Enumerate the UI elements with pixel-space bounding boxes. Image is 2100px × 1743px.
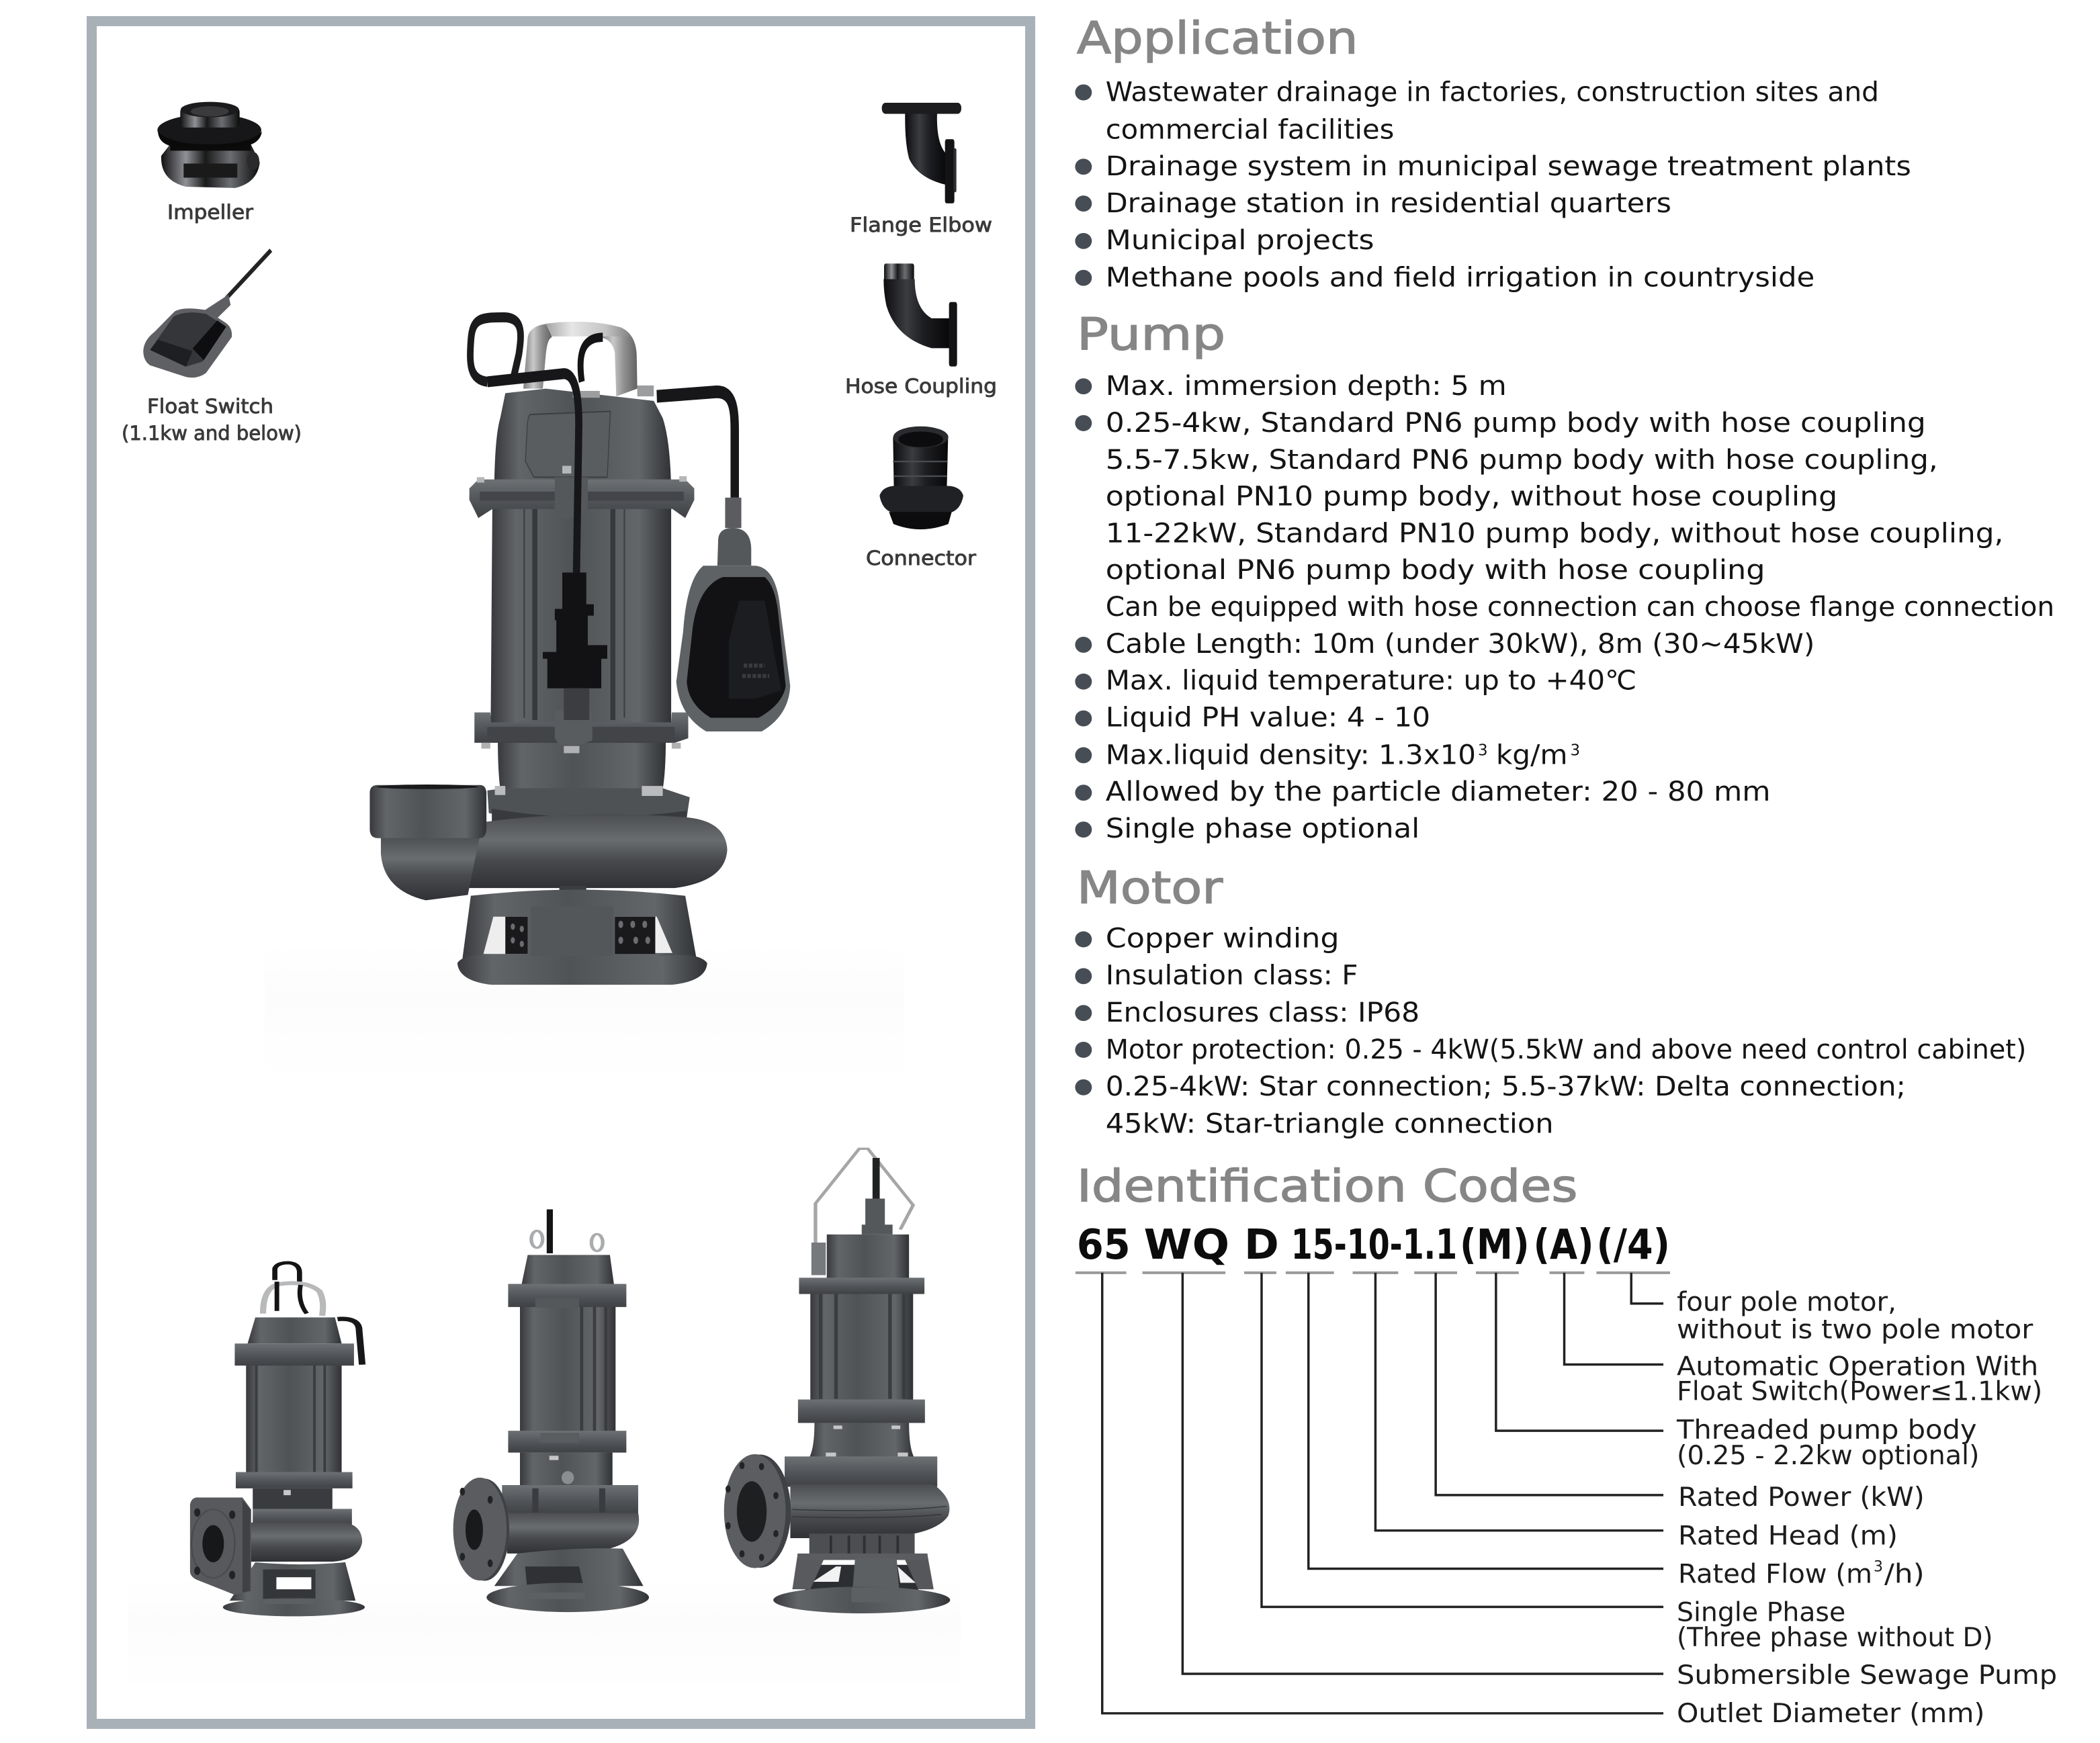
neck — [498, 740, 666, 797]
volute — [505, 1513, 639, 1554]
handle cable — [275, 1263, 300, 1282]
upper flange — [799, 1278, 924, 1294]
cap — [521, 1255, 614, 1285]
flange side face — [243, 1500, 250, 1593]
code explanations: without is two pole motor — [1677, 1315, 2033, 1345]
base — [486, 1582, 649, 1612]
lower flange — [474, 713, 689, 743]
list: pump specifications: optional PN6 pump body with hose coupling — [1106, 555, 1765, 586]
list: motor specifications: 45kW: Star-triangle connection — [1106, 1109, 1554, 1140]
stand window — [276, 1577, 311, 1589]
list: motor specifications: Motor protection: 0.25 - 4kW(5.5kW and above need control cabinet) — [1106, 1034, 2026, 1065]
float collar — [717, 528, 751, 566]
model code: D — [1244, 1220, 1279, 1269]
outlet elbow — [381, 836, 480, 900]
seal plate bolts — [495, 786, 663, 796]
model code: 65 — [1077, 1220, 1131, 1269]
code explanations: Rated Power (kW) — [1678, 1482, 1925, 1513]
ribs — [821, 1293, 904, 1399]
stand windows — [813, 1566, 916, 1582]
strainer right holes — [619, 921, 650, 944]
code underlines — [1076, 1271, 1670, 1274]
code explanations: Rated Flow (m — [1678, 1559, 1872, 1589]
label: Float Switch — [122, 395, 302, 445]
round flange side — [460, 1478, 509, 1581]
barrel ribs — [524, 509, 624, 718]
cable gland — [862, 1199, 893, 1235]
lower flange shade — [487, 727, 674, 740]
heading: Identification Codes: Identification Codes — [1077, 1160, 1577, 1212]
code explanations: Rated Head (m) — [1678, 1521, 1898, 1552]
flange bore — [466, 1509, 483, 1550]
cap — [248, 1317, 342, 1343]
float dark panel — [687, 577, 786, 718]
outlet bore — [202, 1525, 224, 1562]
flange bore — [737, 1481, 767, 1541]
motor cap — [494, 389, 671, 488]
model code: (M) — [1460, 1220, 1530, 1269]
float body — [676, 566, 790, 731]
outlet cup — [369, 785, 486, 838]
list: motor specifications: 0.25-4kW: Star connection; 5.5-37kW: Delta connection; — [1106, 1071, 1906, 1102]
panel: product images frame — [91, 21, 1031, 1724]
code explanations: (0.25 - 2.2kw optional) — [1677, 1441, 1980, 1471]
lower flange — [236, 1472, 353, 1488]
list: application items: Drainage station in residential quarters — [1106, 188, 1671, 219]
neck — [810, 1423, 914, 1458]
section: Identification Codes — [1076, 1160, 2057, 1729]
cap — [827, 1235, 909, 1279]
heading: Pump: Pump — [1077, 308, 1225, 360]
small pump: threaded outlet — [190, 1263, 365, 1616]
stand neck — [560, 886, 586, 904]
seal ring — [502, 1485, 638, 1515]
list: pump specifications: 0.25-4kw, Standard PN6 pump body with hose coupling — [1106, 408, 1926, 439]
accessory: impeller — [157, 102, 262, 224]
model code — [1077, 1220, 1670, 1269]
list: application items: Methane pools and field irrigation in countryside — [1106, 263, 1814, 294]
lower flange — [508, 1431, 626, 1453]
bolts — [532, 1456, 607, 1492]
float label plate — [729, 600, 781, 699]
list: pump specifications: 3 — [1570, 742, 1580, 759]
list: motor specifications: Enclosures class: IP68 — [1106, 997, 1419, 1028]
ribs — [257, 1363, 324, 1474]
list: pump specifications: Max.liquid density: 1.3x10 — [1106, 740, 1476, 770]
accessory: connector — [866, 427, 976, 570]
lower flange centre lug — [555, 711, 593, 745]
heading: Motor: Motor — [1077, 862, 1223, 914]
list: application items: commercial facilities — [1106, 114, 1394, 145]
icon: connector — [879, 427, 963, 529]
round flange side — [729, 1454, 791, 1568]
float strain relief — [725, 498, 742, 528]
seal plate — [487, 788, 690, 822]
stand recess — [263, 1570, 316, 1604]
list: pump specifications: 11-22kW, Standard PN10 pump body, without hose coupling, — [1106, 518, 2003, 549]
connector lines — [1102, 1273, 1663, 1713]
label: Float Switch: (1.1kw and below) — [122, 422, 302, 445]
medium pump: round flange — [453, 1210, 649, 1612]
model code: WQ — [1144, 1220, 1229, 1269]
stand recess — [525, 1566, 585, 1593]
upper flange — [234, 1343, 354, 1366]
lower flange — [798, 1400, 925, 1423]
list: pump specifications: Allowed by the particle diameter: 20 - 80 mm — [1106, 776, 1771, 807]
flange bolts — [194, 1508, 235, 1579]
plug stem — [564, 688, 589, 720]
stand — [462, 890, 697, 963]
cable plug — [543, 572, 607, 688]
base — [773, 1586, 950, 1613]
code explanations: four pole motor, — [1677, 1288, 1896, 1318]
upper bolts — [477, 466, 687, 483]
float marking — [742, 666, 769, 676]
code explanations: /h) — [1884, 1559, 1925, 1589]
stand bridge — [528, 1593, 585, 1599]
top cable — [277, 1282, 307, 1314]
barrel — [246, 1359, 342, 1476]
icon: float switch — [143, 250, 271, 377]
seal ring — [785, 1456, 937, 1486]
list: application items: Drainage system in municipal sewage treatment plants — [1106, 151, 1911, 182]
lifting bail — [816, 1149, 913, 1243]
volute — [462, 814, 728, 888]
list: pump specifications: Cable Length: 10m (under 30kW), 8m (30~45kW) — [1106, 629, 1814, 660]
list: application items: Municipal projects — [1106, 225, 1374, 256]
icon: flange elbow — [882, 103, 961, 204]
label: Hose Coupling: Hose Coupling — [845, 375, 997, 398]
accessory: hose coupling — [845, 263, 997, 398]
stainless handle — [263, 1283, 323, 1316]
stand top ring — [797, 1554, 928, 1560]
stand bridge — [263, 1599, 314, 1604]
strainer left holes — [511, 924, 524, 947]
accessory: flange elbow — [850, 103, 992, 236]
base ring — [457, 955, 707, 985]
list: pump specifications: 3 — [1478, 742, 1488, 759]
stand window left — [484, 917, 528, 954]
label: Impeller: Impeller — [167, 201, 253, 224]
section: Pump — [1075, 308, 2054, 844]
list: motor specifications: Copper winding — [1106, 923, 1340, 954]
stand window right — [615, 917, 672, 953]
neck — [520, 1453, 613, 1485]
bail bracket — [812, 1243, 826, 1275]
code explanations: Single Phase — [1677, 1597, 1845, 1627]
list: pump specifications: Can be equipped with hose connection can choose flange connection — [1106, 592, 2054, 623]
volute — [250, 1523, 362, 1562]
model code: (A) — [1534, 1220, 1593, 1269]
model code: (/4) — [1596, 1220, 1670, 1269]
volute seam — [792, 1507, 947, 1517]
section: Application — [1075, 13, 1911, 294]
code explanations: (Three phase without D) — [1677, 1623, 1993, 1653]
stand inner shade — [805, 1565, 918, 1591]
cap plate bolts — [573, 386, 654, 398]
code explanations: 3 — [1874, 1558, 1883, 1575]
cable — [873, 1158, 880, 1199]
stand right leg — [903, 1555, 934, 1589]
volute — [790, 1484, 949, 1538]
fins — [810, 1533, 915, 1554]
list: pump specifications: 5.5-7.5kw, Standard PN6 pump body with hose coupling, — [1106, 445, 1938, 476]
seal ring ribs — [535, 1488, 602, 1516]
base — [223, 1598, 365, 1616]
main pump with float switch — [369, 317, 790, 985]
heading: Application: Application — [1077, 13, 1358, 64]
neck bolt — [283, 1490, 291, 1495]
label: Flange Elbow: Flange Elbow — [850, 214, 992, 236]
stainless handle right foot — [600, 327, 638, 396]
code explanations: Outlet Diameter (mm) — [1677, 1699, 1985, 1729]
upper flange shade — [480, 492, 684, 501]
upper flange centre lug — [555, 477, 588, 518]
stand column — [851, 1558, 900, 1604]
stand — [230, 1562, 355, 1601]
barrel — [520, 1298, 615, 1435]
stainless handle bar — [545, 322, 631, 337]
lower bolts — [482, 743, 681, 753]
section: Motor — [1075, 862, 2026, 1140]
stand centre rib — [531, 906, 613, 958]
flange bolts — [726, 1462, 779, 1561]
list: pump specifications: Max. liquid temperature: up to +40℃ — [1106, 666, 1636, 697]
icon: hose coupling — [883, 263, 957, 367]
seal ring — [253, 1509, 352, 1525]
barrel rib shade — [532, 509, 615, 720]
right column: specification text — [1075, 13, 2057, 1729]
stand column foot — [851, 1588, 900, 1603]
motor barrel — [490, 495, 671, 731]
stainless handle feet — [523, 324, 552, 389]
neck struts — [253, 1488, 333, 1509]
flange bolts — [460, 1488, 492, 1567]
list: motor specifications — [1075, 923, 2026, 1140]
ribs — [582, 1300, 606, 1433]
side cable — [337, 1319, 362, 1365]
cable — [547, 1210, 553, 1253]
list: application items: Wastewater drainage in factories, construction sites and — [1106, 77, 1879, 108]
model code: 15-10-1.1 — [1291, 1220, 1457, 1269]
code explanations: Threaded pump body — [1676, 1415, 1977, 1445]
fin lines — [831, 1535, 898, 1554]
list: pump specifications: kg/m — [1496, 740, 1568, 770]
barrel — [810, 1292, 913, 1400]
float cable — [657, 392, 735, 498]
large pump: round flange with lifting bail — [724, 1149, 950, 1613]
strainer right — [615, 917, 655, 954]
upper flange — [470, 480, 694, 518]
stand — [494, 1548, 644, 1586]
list: motor specifications: Insulation class: F — [1106, 960, 1358, 991]
motor cable — [487, 373, 579, 577]
round flange — [453, 1478, 507, 1580]
code explanations — [1676, 1288, 2057, 1729]
upper flange lug — [535, 1298, 579, 1308]
list: pump specifications — [1075, 371, 2054, 844]
inner cable — [580, 337, 603, 382]
list: pump specifications: Liquid PH value: 4 - 10 — [1106, 703, 1430, 733]
round flange — [724, 1454, 786, 1568]
list: pump specifications: Single phase optional — [1106, 813, 1419, 844]
lower flange lug — [541, 1433, 579, 1443]
outlet boss ring — [191, 1509, 234, 1578]
list: pump specifications: optional PN10 pump body, without hose coupling — [1106, 482, 1837, 512]
list: pump specifications: Max. immersion depth: 5 m — [1106, 371, 1507, 402]
square outlet flange — [190, 1497, 251, 1595]
list: application items — [1075, 77, 1911, 294]
accessory: float switch — [122, 250, 302, 445]
seal plate shade — [492, 809, 687, 822]
eye bolts — [531, 1231, 603, 1251]
label: Connector: Connector — [866, 547, 976, 570]
code explanations: Submersible Sewage Pump — [1677, 1660, 2057, 1691]
strainer left — [505, 917, 528, 954]
neck plug — [562, 1471, 574, 1484]
code explanations: Automatic Operation With — [1677, 1351, 2038, 1382]
cap recess — [525, 411, 610, 477]
bolts — [826, 1425, 908, 1458]
outlet opening — [376, 785, 478, 789]
cable loop — [470, 317, 521, 382]
upper flange — [508, 1284, 626, 1307]
label: Float Switch: Float Switch — [147, 395, 273, 418]
stand left leg — [792, 1555, 826, 1589]
code explanations: Float Switch(Power≤1.1kw) — [1677, 1376, 2042, 1406]
icon: impeller — [157, 102, 262, 188]
